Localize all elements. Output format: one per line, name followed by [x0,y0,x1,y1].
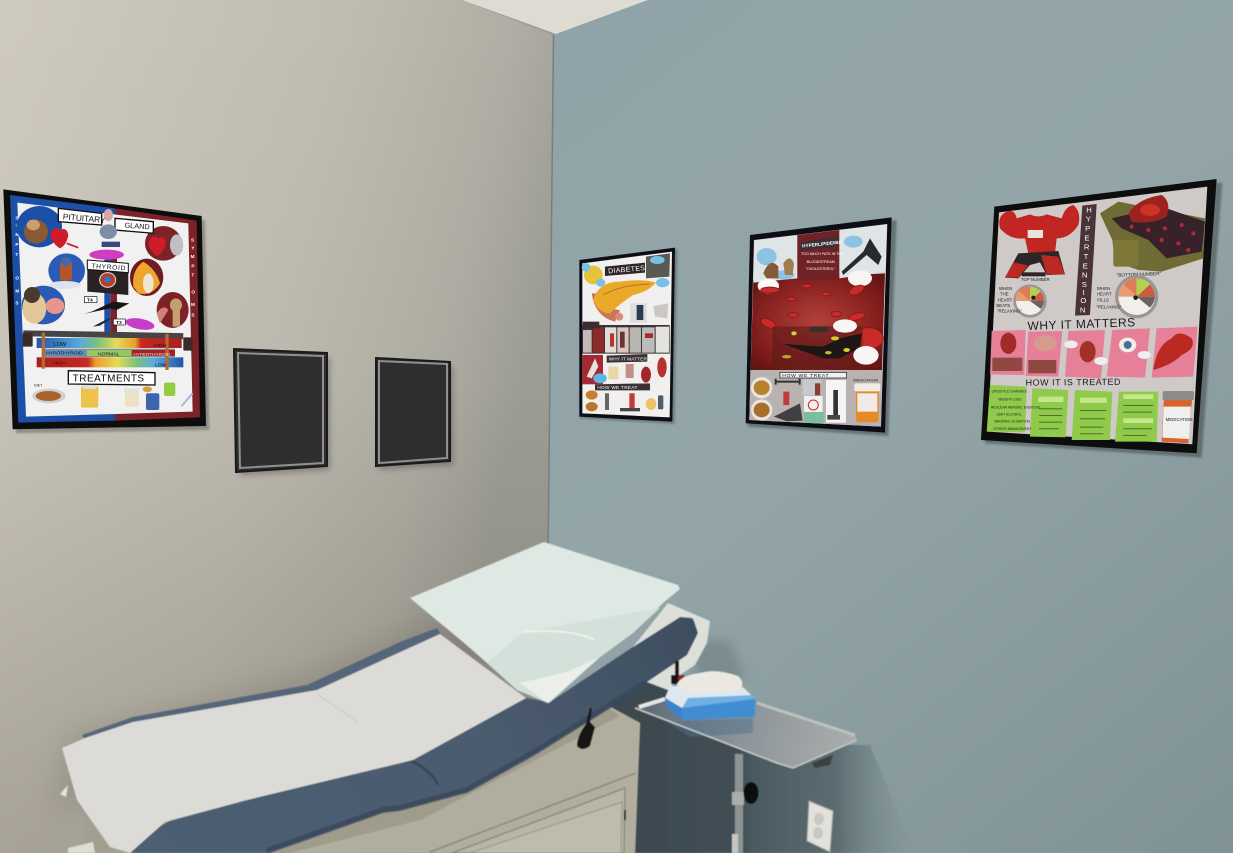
top comic panels [754,224,887,293]
bottom number label: "BOTTOM NUMBER" [1117,271,1162,278]
hypertension vertical title: N [1080,305,1085,314]
gauge side captions: BEATS [996,303,1010,308]
hypertension paper [988,187,1207,444]
treatments heading [68,371,155,385]
treatment band [749,370,882,427]
symptoms side labels: S [15,215,18,220]
gauge side captions: "RELAXING" [1096,304,1122,309]
table left end bracket [60,785,110,853]
gauge side captions: "RELAXING" [997,309,1022,314]
gauge side captions: WHEN [1097,286,1110,291]
hypertension vertical title: T [1084,252,1089,261]
symptoms side labels: S [191,313,194,318]
hyperlipidemia title panel: TOO MUCH FATS IN THE [801,252,844,256]
green treatment cards: WEIGHT LOSS [998,397,1022,401]
symptoms side labels: S [15,301,18,306]
pituitary illustration [100,209,120,247]
how we treat section diabetes: HOW WE TREAT [597,385,638,390]
diabetes paper [582,252,672,417]
gauge side captions: HEART [998,297,1013,302]
medication bottle hypertension [1162,391,1194,443]
blue border half [10,195,115,423]
why it matters heading: WHY IT MATTERS [1027,315,1136,333]
how it is treated heading: HOW IT IS TREATED [1026,377,1121,388]
hypertension vertical title: R [1084,243,1090,252]
systolic gauge [1013,284,1047,318]
wall shadow behind headrest [690,640,745,690]
diabetes title: DIABETES [608,265,646,275]
heart on couch illustration [1100,195,1205,272]
symptoms side labels: Y [191,245,195,250]
lid seam [430,773,636,852]
bat and arrows T4 T3 [83,297,129,327]
hormone level scale bars: HIGH [154,343,167,349]
why it matters section diabetes [582,354,667,384]
room corner line [548,35,554,560]
mattress lower shading [267,682,647,851]
ceiling [462,0,648,34]
pink consequence panels [990,327,1198,378]
symptoms side labels: P [191,263,194,268]
top number label [1021,272,1050,282]
hormone level scale bars: HYPERTHYROID [133,352,171,357]
muscular red heart [999,205,1079,278]
symptoms side labels: M [191,254,195,259]
hypertension vertical title: E [1083,261,1088,270]
left wall [0,0,553,853]
mattress seam [408,760,438,785]
green treatment cards: STRESS MANAGEMENT [993,427,1031,431]
symptoms side labels: T [15,252,18,257]
steel tray [635,699,857,768]
blood vessel artwork [751,273,885,371]
pancreas illustration [584,266,656,322]
maroon border half [115,208,200,421]
how we treat heading hyperlipidemia: HOW WE TREAT [782,373,829,379]
hormone level scale bars: HIGH [53,360,66,366]
symptoms side labels: M [15,289,19,294]
diastolic gauge [1115,275,1158,318]
hypertension vertical title [1075,204,1097,316]
green treatment cards: REGULAR AEROBIC EXERCISE [991,405,1041,409]
medication bottle hypertension: MEDICATION [1166,417,1193,422]
gauge side captions: THE [1000,292,1009,297]
how we treat section diabetes [586,383,663,411]
wall outlet [807,801,833,852]
hormone level scale bars [23,330,193,370]
poster frame [3,189,206,429]
poster: pituitary gland and thyroid [3,189,209,433]
treatments heading: TREATMENTS [73,373,145,384]
hormone level scale bars: LOW [53,342,67,348]
poster: hypertension [981,179,1222,458]
dark side cabinet and shadow [603,682,915,853]
bat and arrows T4 T3: T3 [116,320,122,326]
symptoms side labels: O [15,275,19,280]
green treatment cards: LIFESTYLE CHANGES [992,389,1027,393]
symptoms side labels: M [191,302,195,307]
gauge side captions: FILLS [1097,297,1109,302]
hypertension vertical title: H [1086,205,1092,214]
diabetes frame [579,248,675,422]
gauge side captions: WHEN [999,286,1012,291]
empty dark frame one [234,349,330,476]
symptoms side labels: P [15,242,18,247]
hormone level scale bars: HYPOTHYROID [46,351,83,357]
fat clot in artery [772,326,863,369]
symptoms side labels: M [15,232,19,237]
hyperlipidemia title panel: HYPERLIPIDEMIA [802,239,842,249]
hypertension vertical title: O [1080,296,1086,305]
hyperlipidemia title panel: BLOODSTREAM [807,260,835,264]
hypertension vertical title: P [1085,224,1090,233]
hormone level scale bars: NORMAL [98,352,120,358]
table mattress navy edge [130,616,698,853]
empty dark frame two [376,358,453,470]
hypertension vertical title: S [1082,280,1087,289]
title pituitary: PITUITARY [62,211,106,225]
symptom illustrations left [17,206,85,324]
gauge side captions [996,286,1122,314]
hypertension vertical title: Y [1086,215,1091,224]
top right comic panel [582,253,670,323]
gauge side captions: HEART [1097,292,1112,297]
pink hormone blobs [89,250,155,332]
hyperlipidemia title panel: "CHOLESTEROL" [806,267,836,271]
central stem [104,255,117,335]
symptoms comic row [582,322,670,354]
hyperlipidemia frame [746,217,892,433]
hypertension vertical title: I [1083,288,1085,297]
pillow [410,542,680,703]
thyroid label box [87,260,128,295]
exam table and room furnishings [60,542,915,853]
top number label: TOP NUMBER [1021,277,1050,282]
red blood cells [759,283,883,349]
treatment illustrations hyperlipidemia [751,377,878,423]
symptoms side labels: S [191,238,194,243]
treatment illustrations hyperlipidemia: MEDICATION [853,377,878,382]
beige table base [255,705,640,853]
paper crease [318,695,358,722]
symptoms side labels: O [191,289,195,294]
thyroid label box: THYROID [91,263,126,272]
poster: diabetes [579,248,677,424]
hypertension vertical title: N [1082,271,1087,280]
symptom illustrations right [130,226,189,328]
how we treat heading hyperlipidemia [780,372,847,379]
white paper cover [62,634,526,853]
title gland: GLAND [124,221,150,231]
symptoms side labels: T [191,273,194,278]
black strap and handle [577,661,684,749]
green treatment cards: LIMIT ALCOHOL [997,413,1022,417]
white content area [17,203,193,417]
drawer [452,788,625,853]
hypertension vertical title: E [1084,233,1090,242]
hyperlipidemia title panel [797,230,844,281]
right wall [546,0,1233,853]
green treatment cards [987,385,1158,442]
stand pole and knob [732,754,758,853]
hypertension frame [981,179,1217,453]
treatment illustrations [32,383,193,410]
medication bottle hyperlipidemia [854,383,880,422]
why it matters section diabetes: WHY IT MATTERS [609,357,650,362]
hyperlipidemia paper [749,224,887,427]
mattress back strip [82,628,442,740]
poster: hyperlipidemia [746,217,897,436]
symptoms side labels: Y [15,224,19,229]
paper over headrest [633,603,710,690]
symptoms side labels [15,215,195,318]
treatment illustrations: DIET [34,384,43,388]
green treatment cards: SMOKING CESSATION [994,419,1031,423]
speech bubbles [810,319,879,365]
hormone level scale bars: LOW [155,363,167,369]
title gland [115,218,153,233]
bat and arrows T4 T3: T4 [87,298,93,304]
tissue box [665,671,755,720]
